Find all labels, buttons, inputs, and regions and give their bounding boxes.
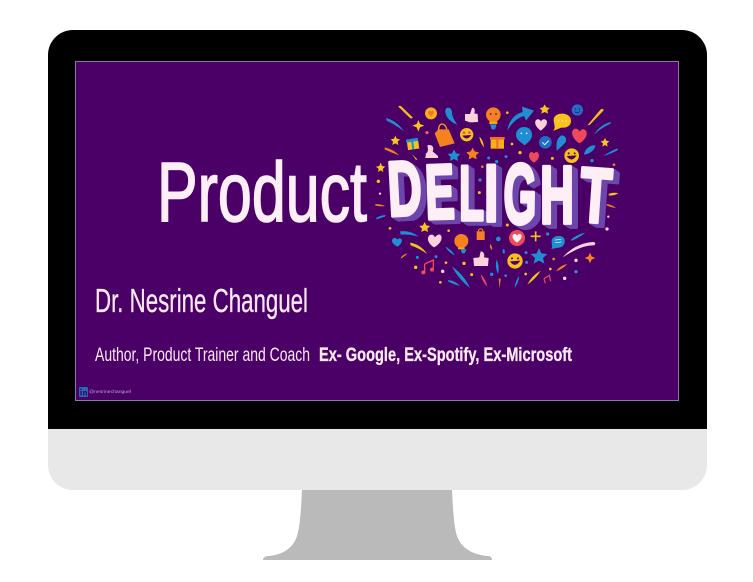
word: DELIGHT letters: H (540, 149, 574, 241)
word: DELIGHT letters (385, 144, 614, 243)
word: DELIGHT letters: L (459, 151, 484, 237)
title word: Product: Product (157, 145, 367, 239)
word: DELIGHT letters: G (503, 147, 537, 243)
word: DELIGHT letters: D (385, 144, 424, 233)
confetti upper (375, 104, 618, 231)
monitor stand (263, 490, 492, 560)
word: DELIGHT letters: I (484, 150, 498, 239)
presenter name: Dr. Nesrine Changuel (95, 282, 308, 319)
word: DELIGHT letters: E (424, 149, 456, 236)
word: DELIGHT letters: T (577, 151, 614, 240)
monitor bezel (48, 30, 707, 429)
linkedin handle (79, 387, 131, 397)
presenter role: Author, Product Trainer and Coach (95, 344, 310, 366)
presenter former employers: Ex- Google, Ex-Spotify, Ex-Microsoft (319, 344, 572, 366)
confetti lower (389, 222, 595, 289)
linkedin handle: @nesrinechanguel (89, 389, 131, 394)
slide screen (76, 62, 678, 400)
monitor chin (48, 429, 707, 490)
